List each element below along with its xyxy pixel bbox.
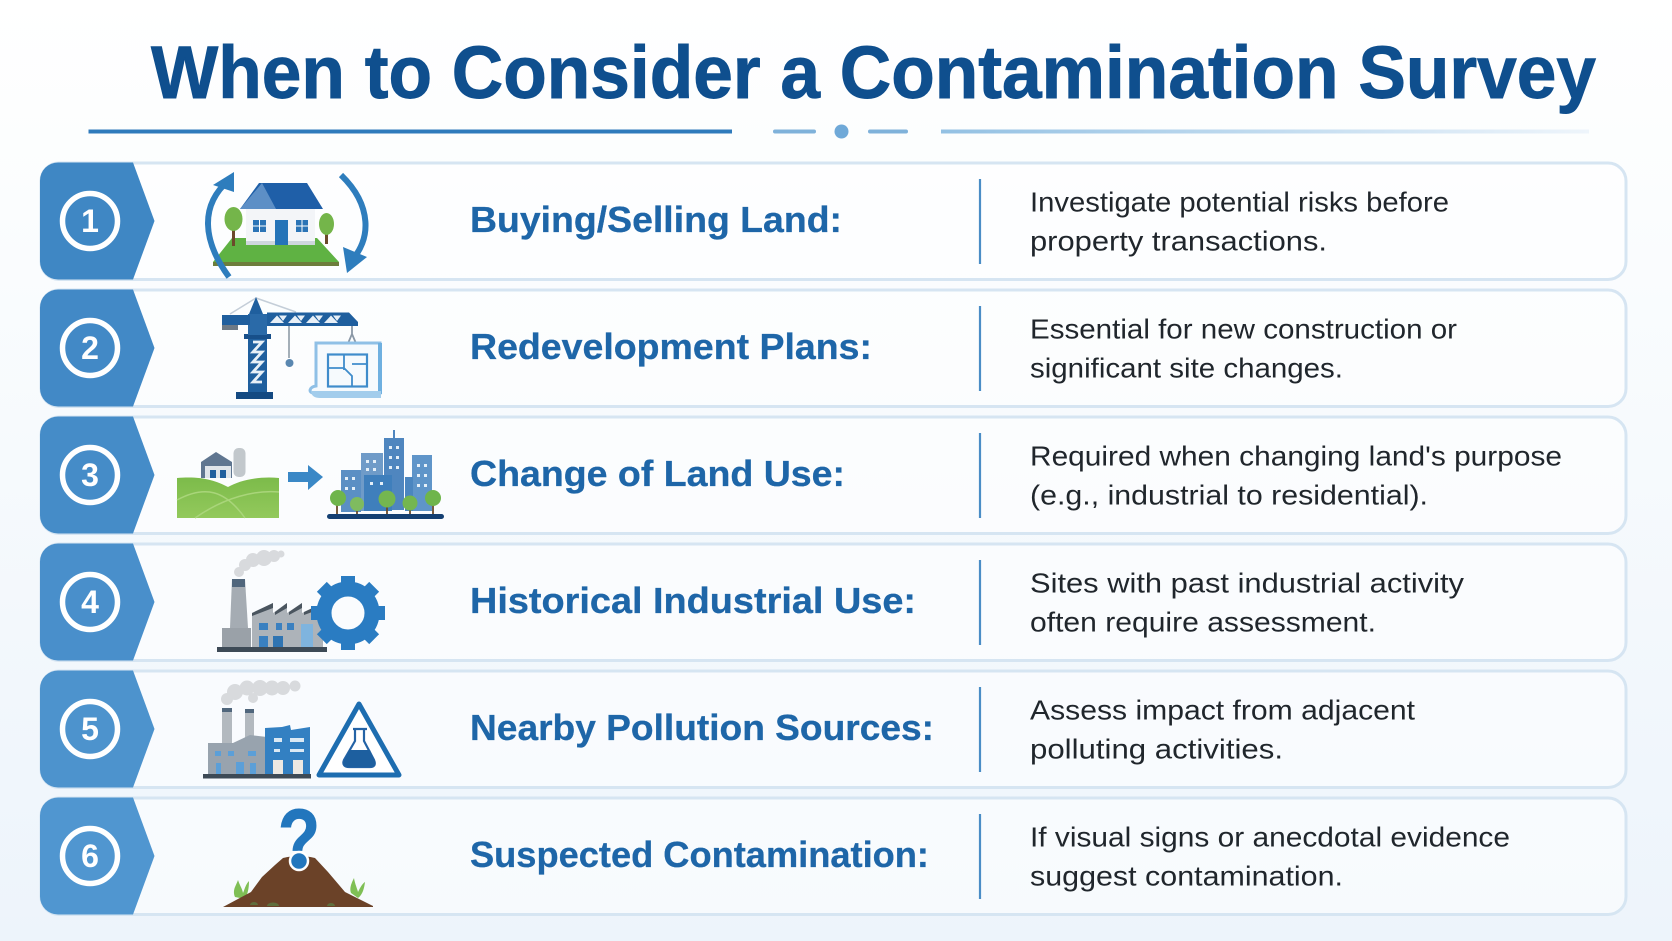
panel: row 2 redevelopment plans xyxy=(40,290,1626,406)
label: Historical Industrial Use: xyxy=(470,580,916,621)
badge 1: 1 xyxy=(81,203,99,239)
panel: row 4 historical industrial use xyxy=(40,544,1626,660)
badge 5 xyxy=(40,670,154,788)
panel: row 5 nearby pollution sources xyxy=(40,670,1626,788)
description: Assess impact from adjacent xyxy=(1030,695,1415,726)
badge 1 xyxy=(40,162,154,280)
icon: farmland to city xyxy=(177,430,444,519)
icon: factory and hazard flask xyxy=(203,680,399,778)
description: significant site changes. xyxy=(1030,353,1343,384)
description: often require assessment. xyxy=(1030,607,1376,638)
description xyxy=(1030,822,1510,892)
description: If visual signs or anecdotal evidence xyxy=(1030,822,1510,853)
label: Nearby Pollution Sources: xyxy=(470,707,934,748)
description: property transactions. xyxy=(1030,226,1327,257)
description xyxy=(1030,695,1415,765)
icon: soil mound with question mark: ? xyxy=(278,792,320,886)
icon: factory and gear xyxy=(217,550,385,652)
badge 2 xyxy=(40,290,154,406)
description: suggest contamination. xyxy=(1030,861,1343,892)
badge 5: 5 xyxy=(81,711,99,747)
badge 3 xyxy=(40,416,154,534)
badge 4: 4 xyxy=(81,584,99,620)
label: Redevelopment Plans: xyxy=(470,326,872,367)
badge 2: 2 xyxy=(81,330,99,366)
description: Essential for new construction or xyxy=(1030,314,1457,345)
description: (e.g., industrial to residential). xyxy=(1030,480,1428,511)
description xyxy=(1030,568,1464,638)
gear xyxy=(311,576,385,650)
badge 3: 3 xyxy=(81,457,99,493)
badge 6: 6 xyxy=(81,838,99,874)
description xyxy=(1030,187,1449,257)
label: Suspected Contamination: xyxy=(470,834,929,875)
badge 4 xyxy=(40,544,154,660)
label: Buying/Selling Land: xyxy=(470,199,842,240)
description: polluting activities. xyxy=(1030,734,1283,765)
panel: row 3 change of land use xyxy=(40,416,1626,534)
description xyxy=(1030,314,1457,384)
panel: row 6 suspected contamination xyxy=(40,792,1626,914)
icon: crane and blueprint xyxy=(222,297,381,399)
description: Sites with past industrial activity xyxy=(1030,568,1464,599)
badge 6 xyxy=(40,798,154,914)
description: Investigate potential risks before xyxy=(1030,187,1449,218)
panel: row 1 buying/selling land xyxy=(40,162,1626,280)
title divider xyxy=(88,124,1589,138)
label: Change of Land Use: xyxy=(470,453,845,494)
description: Required when changing land's purpose xyxy=(1030,441,1562,472)
icon: soil mound with question mark xyxy=(223,792,373,907)
description xyxy=(1030,441,1562,511)
title: When to Consider a Contamination Survey xyxy=(151,31,1596,114)
icon: house with circular arrows xyxy=(208,172,367,277)
